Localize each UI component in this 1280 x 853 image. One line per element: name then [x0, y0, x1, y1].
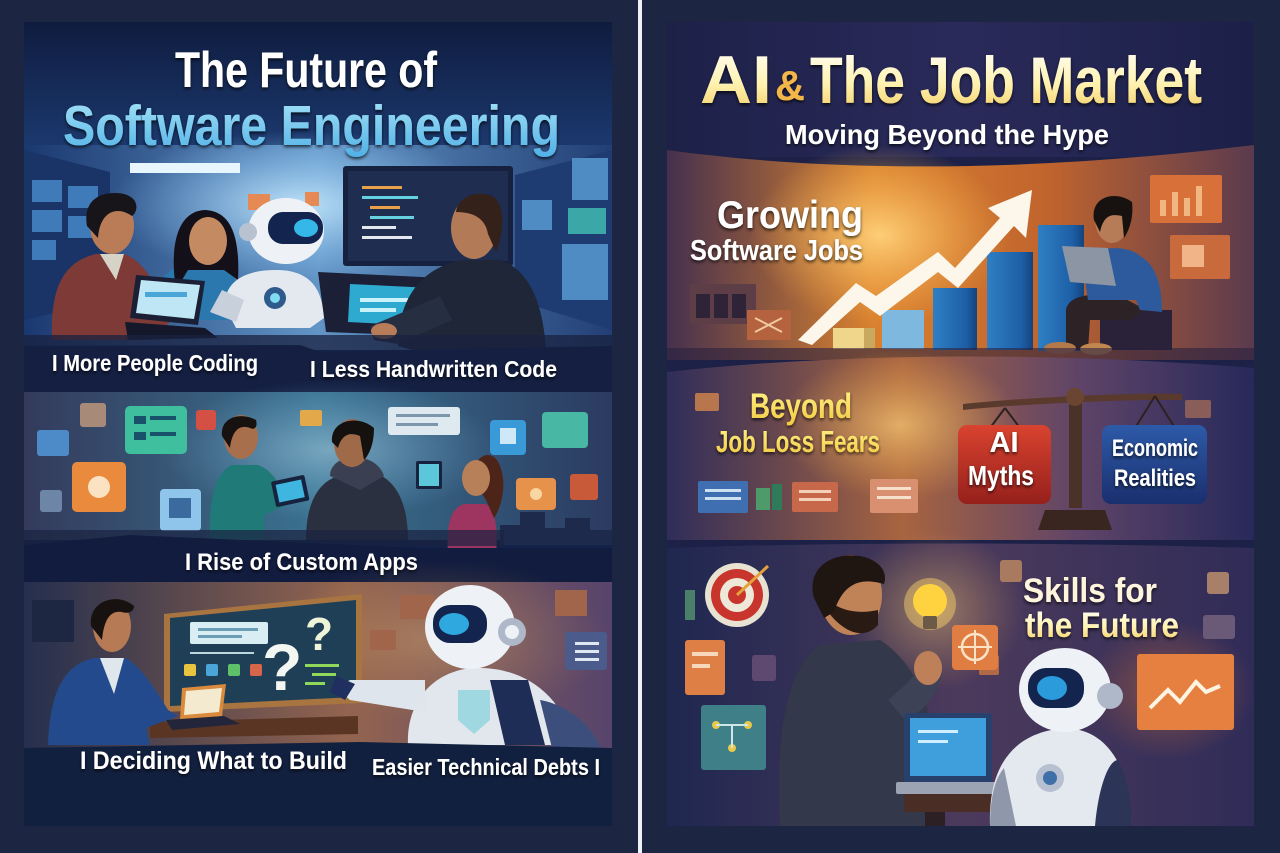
person: man in blue suit: [48, 599, 178, 745]
sign text: Economic: Economic: [1112, 435, 1198, 462]
person: man with laptop: [1044, 196, 1172, 355]
heading: AI and The Job Market: The Job Market: [810, 43, 1202, 117]
heading: Software Jobs: Software Jobs: [690, 235, 863, 267]
sign text: Realities: Realities: [1114, 465, 1196, 492]
sign: AI Myths: [958, 425, 1051, 504]
scene: custom apps: [24, 380, 612, 555]
icon: target: [705, 563, 769, 627]
icon: light bulb: [904, 578, 956, 630]
desk: [150, 716, 358, 738]
bar chart: [833, 225, 1084, 351]
monitor with code: [343, 166, 513, 266]
robot: small: [990, 648, 1132, 826]
caption: Less Handwritten Code: I Less Handwritten Code: [310, 356, 557, 382]
tablet: right: [416, 461, 442, 489]
scene: deciding what to build: [24, 560, 612, 750]
person: woman in magenta top: [448, 455, 503, 555]
heading: Software Engineering: Software Engineering: [63, 94, 560, 158]
person: man in dark suit: [370, 194, 546, 352]
scene: growing software jobs: [667, 145, 1254, 360]
title background: [667, 22, 1254, 157]
heading: Growing: Growing: [717, 194, 863, 237]
chart card: [1137, 654, 1234, 730]
title background: [24, 22, 612, 152]
person: man in hoodie: [306, 419, 408, 540]
heading: AI and The Job Market: [700, 42, 1202, 118]
caption band: top: [24, 345, 612, 392]
heading: The Future of: The Future of: [175, 42, 437, 98]
panel: The Future of Software Engineering: [24, 22, 612, 826]
person: man in teal shirt: [210, 415, 286, 540]
heading: the Future: the Future: [1025, 606, 1179, 645]
robot: centre: [210, 198, 324, 328]
laptop: whiteboard desk: [166, 684, 240, 730]
growth arrow: [798, 190, 1032, 345]
tablet: centre: [271, 475, 310, 507]
caption: Easier Technical Debts: Easier Technical Debts I: [372, 754, 600, 780]
question marks: [262, 608, 339, 704]
laptop: left: [125, 275, 218, 340]
scene: beyond job loss fears: [667, 350, 1254, 540]
caption: Rise of Custom Apps: I Rise of Custom Apps: [185, 549, 418, 576]
centre divider: [638, 0, 642, 853]
panel: AI and The Job Market: [667, 22, 1254, 826]
heading: Job Loss Fears: Job Loss Fears: [716, 424, 880, 459]
whiteboard: [164, 594, 362, 712]
caption: Deciding What to Build: I Deciding What to Build: [80, 747, 347, 775]
caption: More People Coding: I More People Coding: [52, 350, 258, 376]
scene: team coding with robot: [24, 130, 612, 352]
document cards: [695, 393, 1211, 513]
heading: AI and The Job Market: &: [775, 62, 805, 109]
heading: AI and The Job Market: AI: [700, 42, 772, 118]
laptop: desk: [896, 713, 1060, 826]
icon: crosshair card: [952, 625, 998, 670]
floating cards: [690, 175, 1230, 340]
sign text: AI: AI: [990, 427, 1018, 459]
person: man in maroon jacket: [52, 193, 170, 340]
subheading: Moving Beyond the Hype: Moving Beyond the Hype: [785, 119, 1109, 150]
robot: large: [330, 585, 600, 748]
question marks: ?: [305, 608, 333, 660]
question marks: ?: [262, 630, 302, 704]
caption band: bottom: [24, 742, 612, 826]
person: bearded man: [779, 555, 942, 826]
balance scale: [963, 388, 1182, 530]
sign: Economic Realities: [1102, 425, 1207, 504]
caption band: middle: [24, 535, 612, 584]
app cards floating: [37, 403, 598, 531]
laptop: right: [318, 272, 442, 336]
heading: Beyond: Beyond: [750, 387, 852, 426]
sign text: Myths: Myths: [968, 460, 1034, 491]
skill cards: [685, 560, 1235, 770]
heading: Skills for: Skills for: [1023, 572, 1157, 610]
person: woman in blue top: [150, 210, 238, 320]
scene: skills for the future: [667, 530, 1254, 826]
